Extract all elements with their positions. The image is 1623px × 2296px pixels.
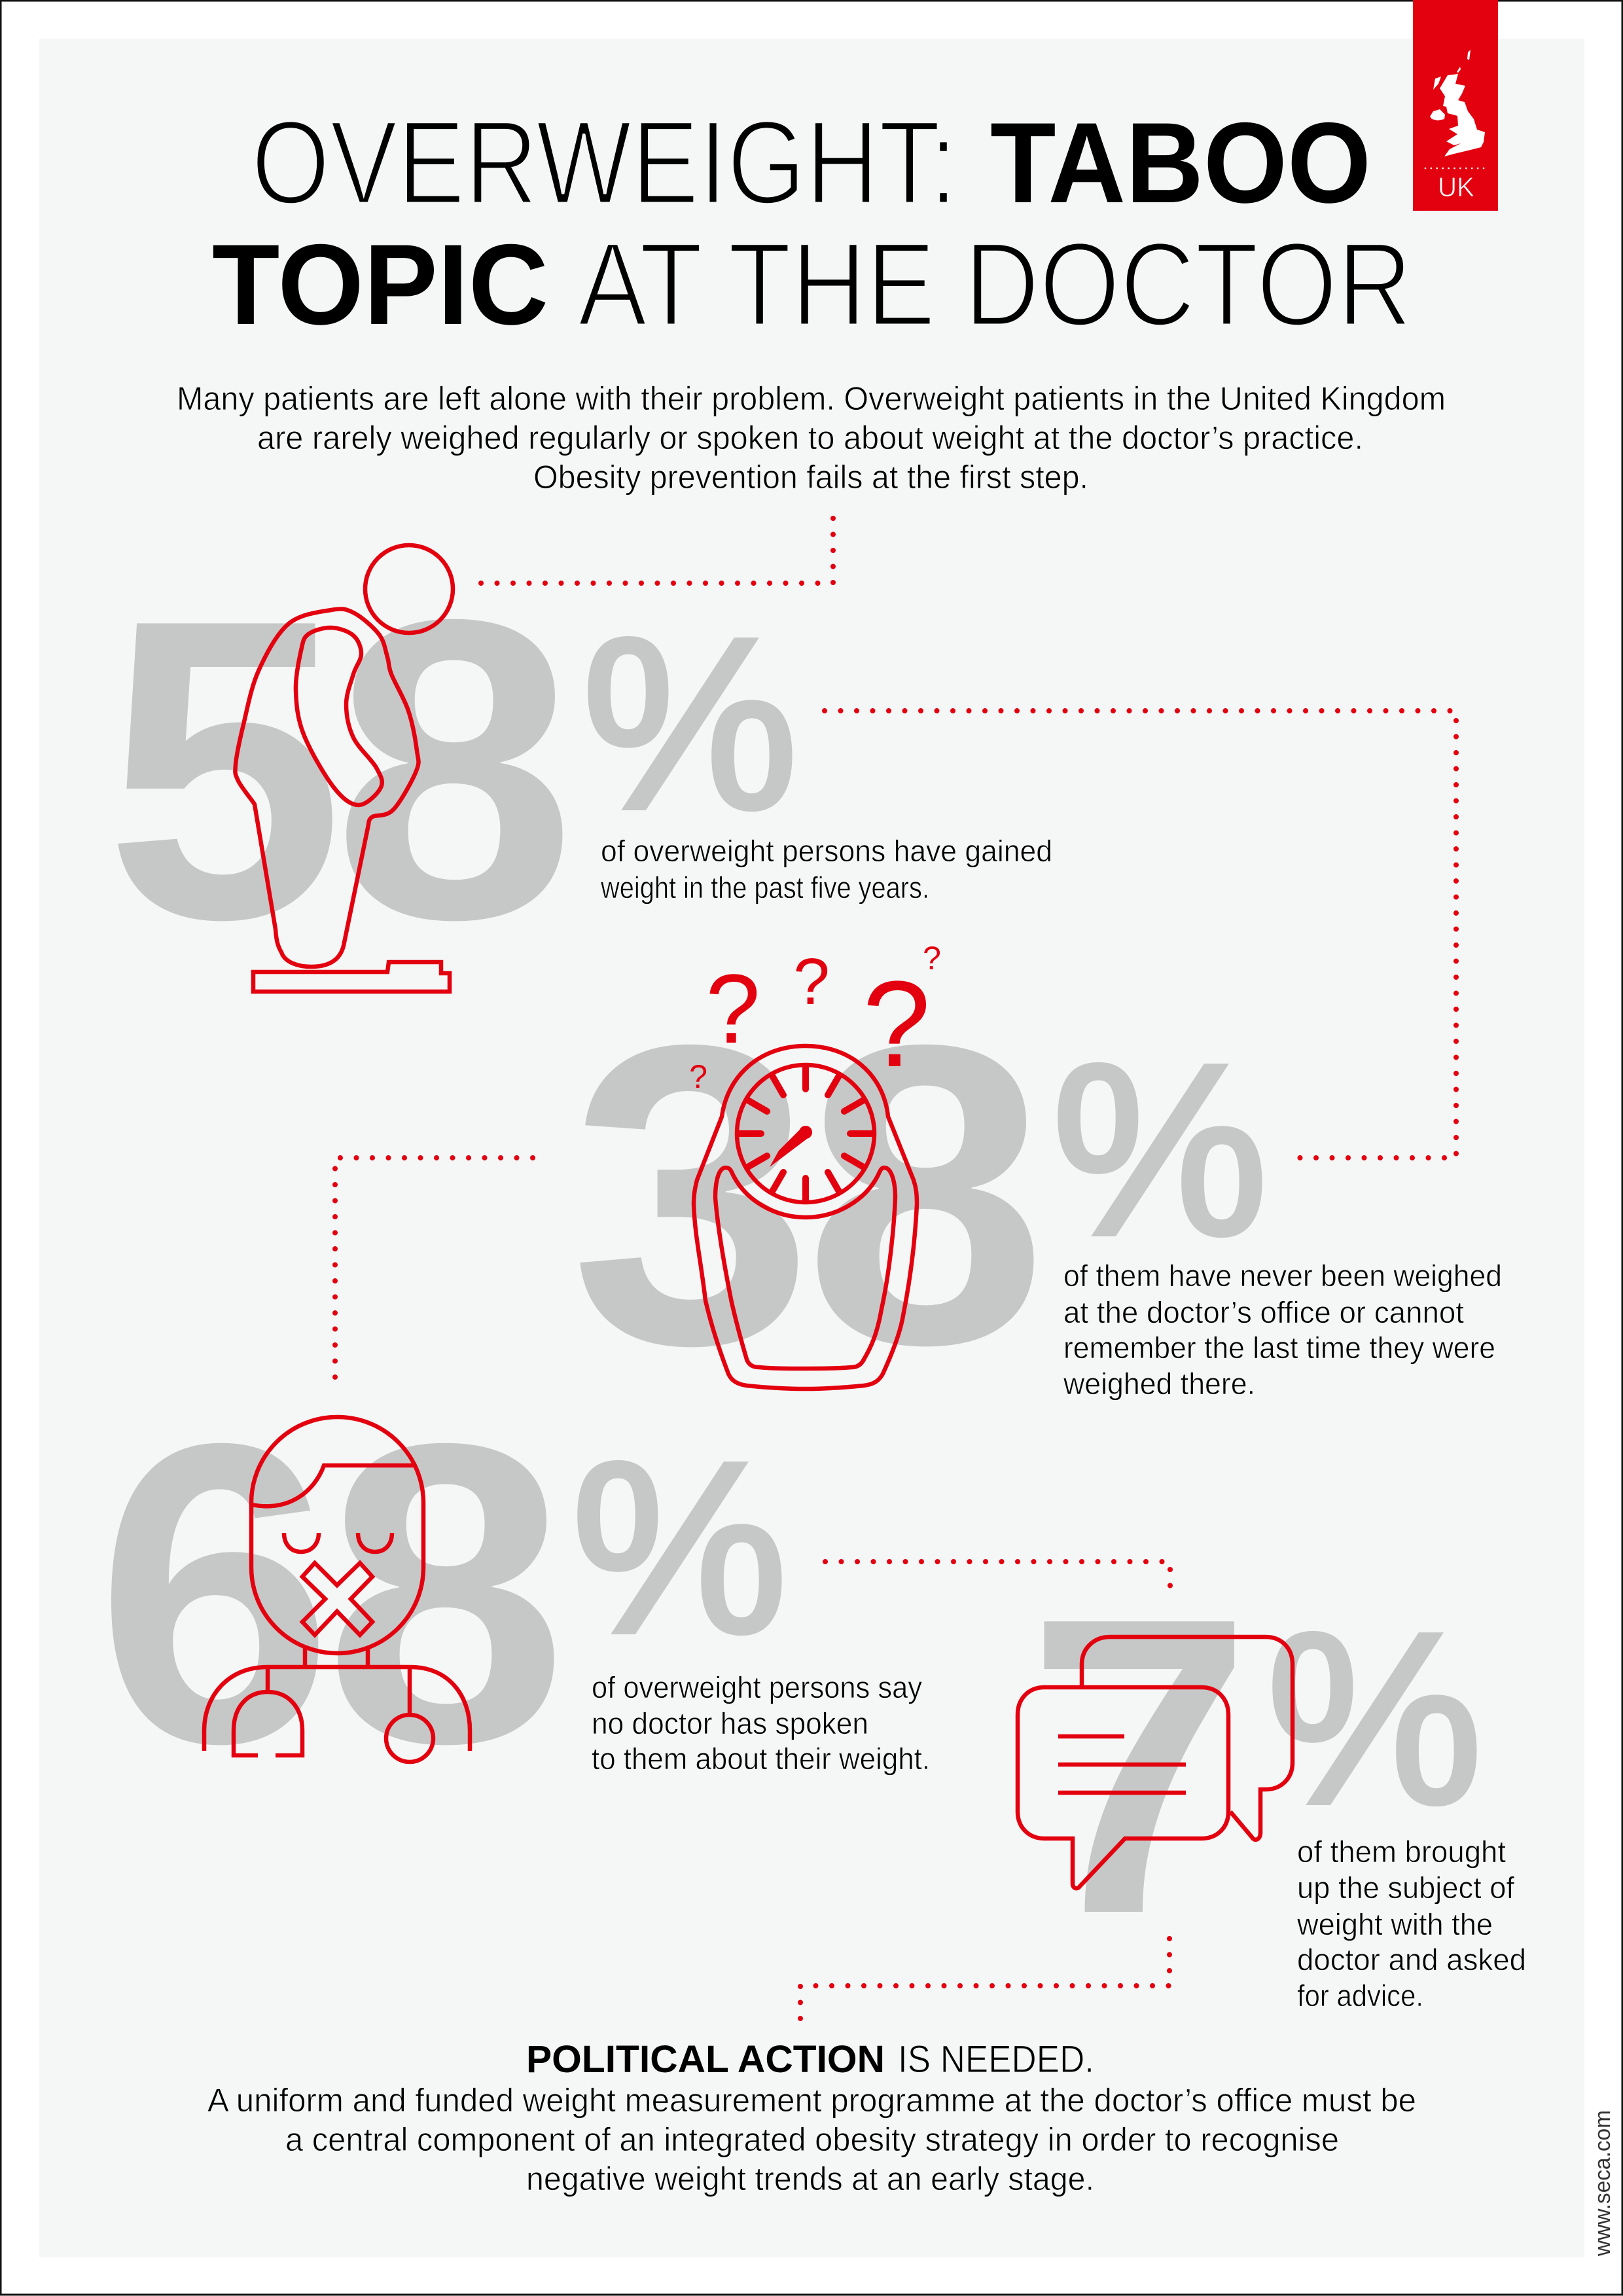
description: doctor and asked xyxy=(1297,1943,1526,1977)
dotted rule xyxy=(1425,168,1485,169)
question marks: ? xyxy=(793,945,830,1018)
number: 7: 7 xyxy=(1027,1530,1252,2001)
title: OVERWEIGHT: xyxy=(251,96,957,229)
number: 38 xyxy=(570,957,1047,1433)
number: 58 xyxy=(105,531,576,1008)
description: to them about their weight. xyxy=(592,1742,930,1776)
description: weight with the xyxy=(1296,1907,1493,1941)
description: weighed there. xyxy=(1063,1367,1255,1401)
intro text: Obesity prevention fails at the first step. xyxy=(533,459,1088,495)
description: for advice. xyxy=(1297,1979,1423,2013)
number: 58: 8 xyxy=(332,531,576,1008)
website credit: www.seca.com xyxy=(1590,2110,1615,2257)
number: 58: 5 xyxy=(105,531,344,1008)
question marks xyxy=(689,940,941,1095)
label: UK: UK xyxy=(1438,171,1474,202)
connector: 7 percent to conclusion xyxy=(800,1939,1169,2019)
description xyxy=(600,834,1052,905)
percent sign: % xyxy=(582,587,798,859)
badge: UK xyxy=(1413,0,1498,211)
body text: A uniform and funded weight measurement programme at the doctor’s office must be xyxy=(207,2082,1416,2119)
title: TOPIC xyxy=(212,221,548,349)
heading: IS NEEDED. xyxy=(898,2038,1094,2081)
description: of them brought xyxy=(1297,1835,1506,1869)
description: of overweight persons have gained xyxy=(601,834,1052,868)
description: of them have never been weighed xyxy=(1063,1259,1502,1293)
number: 68: 8 xyxy=(324,1355,567,1832)
heading xyxy=(526,2038,1094,2081)
percent sign: % xyxy=(1052,1013,1268,1285)
percent sign: % xyxy=(1266,1582,1483,1854)
icon: bathroom scale xyxy=(694,1046,917,1389)
description: remember the last time they were xyxy=(1063,1331,1495,1365)
number: 38: 3 xyxy=(570,957,813,1433)
icon: person on scale xyxy=(235,545,453,992)
intro text: Many patients are left alone with their problem. Overweight patients in the United Kingdom xyxy=(177,380,1446,417)
question marks: ? xyxy=(923,940,941,977)
title: AT THE DOCTOR xyxy=(578,217,1412,351)
description: no doctor has spoken xyxy=(592,1706,868,1740)
panel: 58 percent xyxy=(105,531,1052,1008)
conclusion xyxy=(207,2038,1416,2197)
question marks: ? xyxy=(863,956,931,1092)
intro text: are rarely weighed regularly or spoken to about weight at the doctor’s practice. xyxy=(257,420,1363,456)
number: 38: 8 xyxy=(804,957,1047,1433)
body text: a central component of an integrated obesity strategy in order to recognise xyxy=(285,2121,1339,2158)
title: TABOO xyxy=(990,99,1371,227)
description xyxy=(1063,1259,1502,1401)
description: up the subject of xyxy=(1297,1871,1514,1905)
icon: doctor with covered mouth xyxy=(204,1417,470,1762)
connector: 58 percent to 38 percent xyxy=(825,711,1456,1158)
panel: 68 percent xyxy=(96,1355,930,1832)
description xyxy=(592,1670,930,1776)
description: at the doctor’s office or cannot xyxy=(1063,1295,1464,1329)
panel: 38 percent xyxy=(570,940,1502,1433)
percent sign: % xyxy=(571,1411,788,1683)
number: 68: 6 xyxy=(96,1355,334,1832)
connector: intro to 58 percent xyxy=(480,518,833,583)
intro text xyxy=(177,380,1446,495)
description: of overweight persons say xyxy=(592,1670,922,1704)
title xyxy=(212,96,1412,351)
body text: negative weight trends at an early stage. xyxy=(526,2161,1094,2197)
body text xyxy=(207,2082,1416,2197)
question marks: ? xyxy=(705,954,760,1064)
connector: 68 percent to 7 percent xyxy=(825,1562,1170,1589)
connector: 38 percent to 68 percent xyxy=(335,1158,533,1380)
number: 68 xyxy=(96,1355,567,1832)
heading: POLITICAL ACTION xyxy=(526,2038,885,2081)
description: weight in the past five years. xyxy=(600,870,929,905)
needle xyxy=(770,1128,810,1167)
panel: 7 percent xyxy=(1018,1530,1526,2013)
icon: speech bubbles xyxy=(1018,1637,1293,1888)
question marks: ? xyxy=(689,1058,707,1095)
description xyxy=(1296,1835,1526,2013)
icon: UK map xyxy=(1430,50,1485,156)
